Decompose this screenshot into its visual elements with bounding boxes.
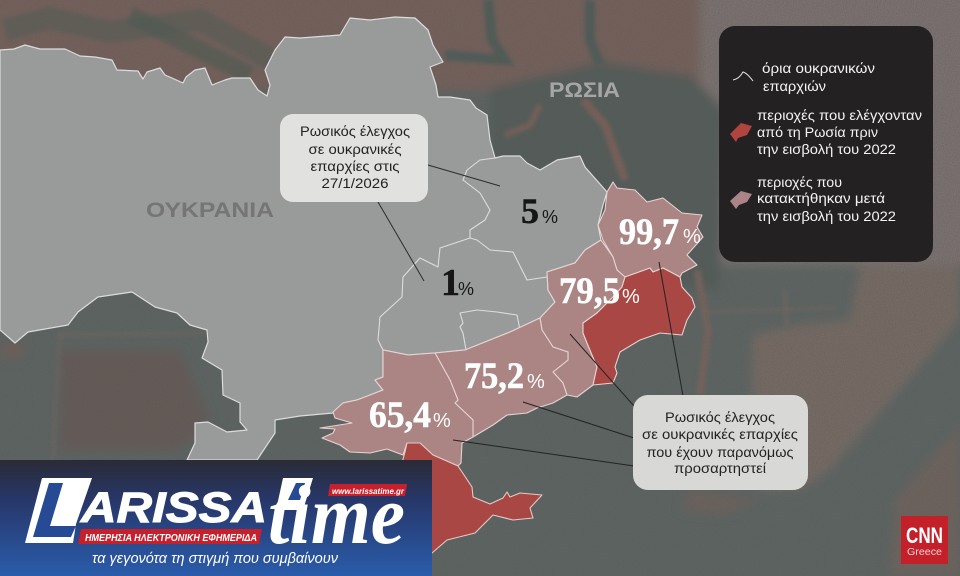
value: 65,4%: 65,4	[369, 395, 431, 436]
callout: control on 27/1/2026	[280, 114, 428, 202]
callout: control on 27/1/2026: σε ουκρανικές	[308, 141, 402, 157]
callout: illegally annexed regions: Ρωσικός έλεγχος	[665, 409, 775, 425]
label: Russia: ΡΩΣΙΑ	[549, 79, 620, 102]
logo word: time: time	[268, 469, 405, 562]
legend text: before the invasion: από τη Ρωσία πριν	[757, 124, 878, 140]
value: 99,7%: %	[683, 226, 701, 248]
logo word: ARISSA: ARISSA	[80, 484, 267, 532]
map: occupied region Zaporizhzhia	[435, 318, 568, 437]
callout: control on 27/1/2026: 27/1/2026	[322, 175, 389, 191]
value: 99,7%: 99,7	[619, 212, 679, 253]
map: area held before 2022, Donbas	[583, 268, 695, 385]
icon: pink swatch	[730, 191, 752, 209]
logo strip: daily newspaper	[78, 529, 262, 544]
logo strip: daily newspaper: ΗΜΕΡΗΣΙΑ ΗΛΕΚΤΡΟΝΙΚΗ ΕΦΗΜΕΡΙΔΑ	[85, 533, 257, 544]
value: 5%: %	[542, 207, 558, 227]
icon: border line	[733, 72, 753, 81]
value: 1%	[441, 262, 474, 304]
logo: CNN Greece: CNN	[906, 523, 943, 548]
value: 1%: %	[458, 279, 474, 299]
map: gray Ukraine territory	[0, 17, 607, 460]
legend text: before the invasion	[757, 107, 922, 157]
map: occupied region Kherson	[320, 350, 473, 466]
logo: CNN Greece	[901, 516, 948, 564]
value: 75,2%: 75,2	[464, 356, 524, 397]
callout: illegally annexed regions: που έχουν παρανόμως	[646, 444, 794, 460]
legend text: borders: επαρχιών	[763, 78, 826, 94]
label: Ukraine: ΟΥΚΡΑΝΙΑ	[146, 199, 274, 222]
value: 79,5%: %	[622, 286, 640, 308]
map: internal region borders	[378, 158, 547, 350]
legend text: before the invasion: την εισβολή του 2022	[757, 141, 896, 157]
callout: illegally annexed regions: σε ουκρανικές επαρχίες	[642, 426, 798, 442]
logo mark: L	[25, 478, 92, 543]
legend text: after the invasion: την εισβολή του 2022	[757, 208, 896, 224]
map: occupied region Luhansk	[598, 182, 703, 277]
icon: red swatch	[730, 123, 752, 142]
legend text: after the invasion	[757, 174, 896, 224]
legend text: before the invasion: περιοχές που ελέγχονταν	[757, 107, 922, 123]
value: 5%: 5	[521, 191, 539, 231]
value: 79,5%: 79,5	[559, 271, 620, 312]
leader lines: upper callout	[378, 165, 500, 281]
value: 75,2%: %	[527, 371, 545, 393]
callout: control on 27/1/2026: Ρωσικός έλεγχος	[300, 123, 410, 139]
legend text: after the invasion: κατακτήθηκαν μετά	[757, 190, 885, 206]
legend panel	[719, 26, 933, 262]
callout: control on 27/1/2026: επαρχίες στις	[310, 158, 400, 174]
tagline: τα γεγονότα τη στιγμή που συμβαίνουν	[92, 550, 338, 567]
legend text: borders	[762, 60, 875, 94]
banner: Larissa Time	[0, 460, 432, 576]
legend text: after the invasion: περιοχές που	[757, 174, 842, 190]
callout: illegally annexed regions: προσαρτηστεί	[674, 460, 766, 476]
logo: CNN Greece: Greece	[907, 547, 942, 558]
value: 5%	[521, 191, 558, 231]
value: 65,4%: %	[433, 410, 451, 432]
legend text: borders: όρια ουκρανικών	[762, 60, 875, 76]
value: 1%: 1	[441, 262, 460, 304]
map: area held before 2022, Crimea	[400, 443, 542, 560]
callout: illegally annexed regions	[633, 395, 808, 490]
leader lines: lower callout	[453, 262, 683, 466]
map: occupied region Donetsk	[540, 240, 625, 397]
logo pill: website: www.larissatime.gr	[332, 486, 405, 496]
